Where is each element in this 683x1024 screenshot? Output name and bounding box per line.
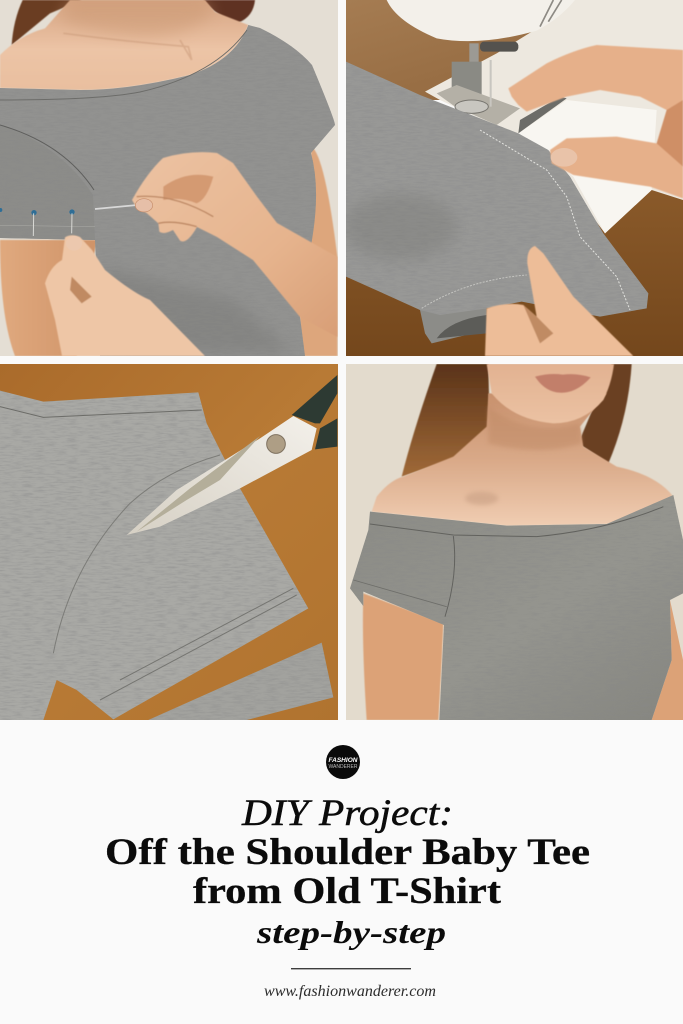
panel: step 4 finished off-the-shoulder tee: [346, 364, 683, 720]
lower hand: [485, 246, 633, 356]
collarbone shadow: [465, 492, 498, 505]
wall and table: [346, 0, 683, 356]
thumb nail: [66, 236, 82, 251]
finger shadow: [523, 305, 553, 343]
cut-off strip: [148, 643, 333, 720]
long hair: [402, 364, 632, 477]
fold shadow: [343, 193, 457, 260]
curled finger shadow: [163, 175, 213, 203]
presser foot and needle bar: [437, 42, 520, 125]
hem stitching: [422, 275, 527, 308]
divider rule: [291, 968, 411, 969]
off-the-shoulder t-shirt: [350, 495, 683, 720]
neck and shoulders: [372, 393, 673, 526]
face and chin: [487, 364, 614, 423]
neckband seam: [370, 507, 663, 537]
panel: step 1 pinning the sleeve: [0, 0, 338, 356]
sewing machine base: [425, 0, 683, 233]
finger creases: [137, 196, 213, 227]
hair: [12, 0, 255, 45]
heading: from Old T-Shirt: from Old T-Shirt: [193, 871, 502, 912]
subheading: step-by-step: step-by-step: [256, 914, 446, 950]
neckband seam: [0, 30, 247, 100]
logo badge: WANDERER: [328, 764, 358, 770]
right arm: [300, 147, 337, 356]
needle: [95, 205, 137, 209]
fingernail: [135, 199, 153, 212]
scissor blades: [127, 416, 317, 535]
lips: [535, 374, 591, 393]
t-shirt body: [0, 25, 335, 356]
studio wall: [346, 364, 683, 720]
finger shading: [657, 100, 683, 167]
fabric under the foot: [518, 97, 567, 133]
top-stitching: [480, 130, 630, 310]
chest skin: [0, 0, 248, 90]
left arm: [0, 240, 97, 356]
scissor blade bevel: [137, 436, 260, 532]
lower shirt shading: [100, 267, 293, 353]
scissor pivot screw: [267, 435, 285, 453]
pinching right hand and forearm: [132, 152, 337, 337]
thumb nail: [551, 148, 577, 167]
sewing pins: [0, 208, 75, 236]
left arm: [363, 593, 443, 720]
heading: Off the Shoulder Baby Tee: Off the Shoulder Baby Tee: [105, 832, 590, 873]
scissors: [127, 375, 337, 535]
upper right hand: [508, 45, 683, 198]
right arm: [652, 600, 683, 720]
panel: step 3 cutting the sleeve: [0, 364, 338, 720]
sleeve seam: [445, 536, 455, 617]
website url: www.fashionwanderer.com: [264, 983, 436, 1000]
sleeve hem lip and opening: [420, 308, 487, 343]
neckband seam: [0, 407, 202, 417]
sleeve seam: [53, 455, 220, 653]
hem stitches: [0, 225, 95, 227]
flat t-shirt: [0, 391, 308, 720]
lower left hand: [45, 235, 205, 356]
sewing machine head: [387, 0, 575, 41]
neck shadow: [488, 407, 582, 450]
sleeve seam: [0, 125, 94, 190]
machine metal trim: [540, 0, 562, 27]
wooden table: [0, 364, 338, 720]
t-shirt being sewn: [346, 62, 648, 317]
sleeve hem: [353, 580, 447, 607]
logo badge: FASHION: [328, 757, 358, 764]
neck shadow: [60, 0, 213, 37]
panel: step 2 sewing the seam: [346, 0, 683, 356]
heading: DIY Project: DIY Project:: [241, 793, 453, 834]
collar bone shading: [63, 33, 192, 60]
scissor handles: [292, 375, 337, 423]
hand shadow: [70, 277, 92, 303]
hem stitching: [100, 588, 297, 700]
logo badge: [326, 745, 360, 779]
